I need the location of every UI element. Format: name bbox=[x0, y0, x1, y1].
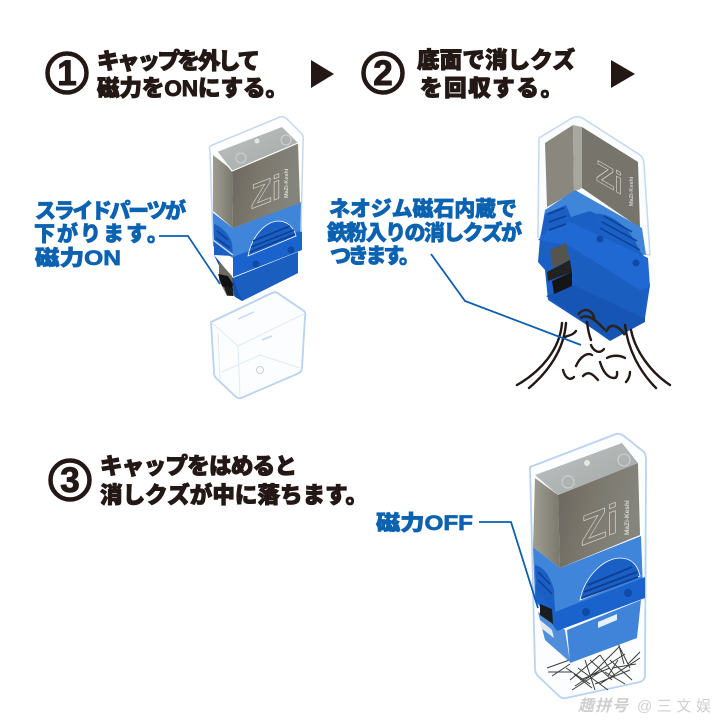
step 1 text: キャップを外して bbox=[97, 49, 260, 74]
slider bbox=[218, 262, 234, 296]
swarf on bottom bbox=[578, 310, 625, 335]
blue dome bbox=[580, 558, 640, 600]
logo: Zi bbox=[581, 495, 618, 556]
eraser 1: without cap bbox=[210, 117, 303, 301]
watermark: 趣拼号 bbox=[578, 697, 629, 715]
step 1 number: 1 bbox=[57, 54, 77, 93]
leader line: slider bbox=[159, 236, 220, 284]
left ribs bbox=[214, 224, 233, 256]
clear case bbox=[538, 117, 650, 255]
arrow 2 bbox=[611, 60, 635, 88]
label: slider: 磁力ON bbox=[35, 247, 121, 270]
swarf in case bbox=[547, 642, 640, 690]
step 1 number bbox=[48, 54, 86, 93]
slider bbox=[540, 604, 553, 624]
label: magnet off: 磁力OFF bbox=[376, 512, 473, 535]
label: slider: 下がります。 bbox=[34, 222, 168, 246]
step 1 text: 磁力をONにする。 bbox=[97, 76, 288, 101]
logo small text: MaZi-Keshi bbox=[284, 168, 290, 198]
label: magnet: つきます。 bbox=[330, 245, 420, 268]
eraser 3: with cap on bbox=[530, 434, 646, 698]
logo: Zi bbox=[251, 167, 281, 217]
watermark bbox=[578, 697, 711, 715]
eraser 2: bottom view bbox=[517, 117, 670, 388]
logo small text: MaZi-Keshi bbox=[624, 500, 631, 535]
step 2 number bbox=[364, 54, 402, 93]
leader line: magnet off bbox=[479, 522, 538, 608]
blue body bbox=[538, 205, 650, 340]
step 1 text bbox=[97, 49, 288, 101]
magnetic swarf and lines bbox=[517, 322, 670, 388]
arrow 1 bbox=[311, 60, 334, 88]
label: magnet: 鉄粉入りの消しクズが bbox=[327, 221, 522, 245]
step 2 text bbox=[417, 47, 575, 101]
grey block bbox=[533, 443, 640, 568]
step 2 text: 底面で消しクズ bbox=[417, 47, 575, 73]
label: magnet bbox=[327, 198, 522, 268]
watermark: @三文娱 bbox=[637, 698, 711, 715]
dome ribs bbox=[594, 214, 640, 252]
lower blue block bbox=[214, 252, 298, 301]
step 1 heading bbox=[48, 49, 288, 101]
step 3 number bbox=[50, 460, 90, 500]
label: magnet: ネオジム磁石内蔵で bbox=[329, 198, 517, 221]
logo: Zi bbox=[596, 153, 623, 202]
clear case bbox=[210, 117, 303, 255]
step 3 text: 消しクズが中に落ちます。 bbox=[100, 482, 368, 508]
logo small text: MaZi-Keshi bbox=[629, 176, 635, 206]
light sleeve bbox=[533, 536, 643, 618]
step 3 text: キャップをはめると bbox=[100, 454, 297, 479]
lower blue block bbox=[567, 600, 641, 663]
step 3 number: 3 bbox=[60, 461, 80, 500]
light blue sleeve bbox=[212, 202, 302, 258]
step 3 heading bbox=[50, 454, 368, 508]
cap bbox=[211, 292, 305, 398]
step 2 text: を回収する。 bbox=[420, 76, 563, 101]
blue band bbox=[233, 230, 302, 277]
blue band bbox=[535, 577, 645, 631]
step 2 heading bbox=[364, 47, 575, 101]
grey block bbox=[213, 127, 300, 228]
slider bbox=[547, 243, 572, 294]
label: slider: スライドパーツが bbox=[35, 199, 186, 223]
blue dome bbox=[248, 221, 296, 256]
clear case bbox=[530, 434, 646, 698]
step 3 text bbox=[100, 454, 368, 508]
grey block bbox=[545, 125, 640, 228]
step 2 number: 2 bbox=[373, 54, 393, 93]
label: slider bbox=[34, 199, 186, 270]
light sleeve bbox=[540, 190, 646, 255]
leader line: magnet bbox=[431, 254, 581, 345]
left ribs bbox=[535, 565, 555, 612]
